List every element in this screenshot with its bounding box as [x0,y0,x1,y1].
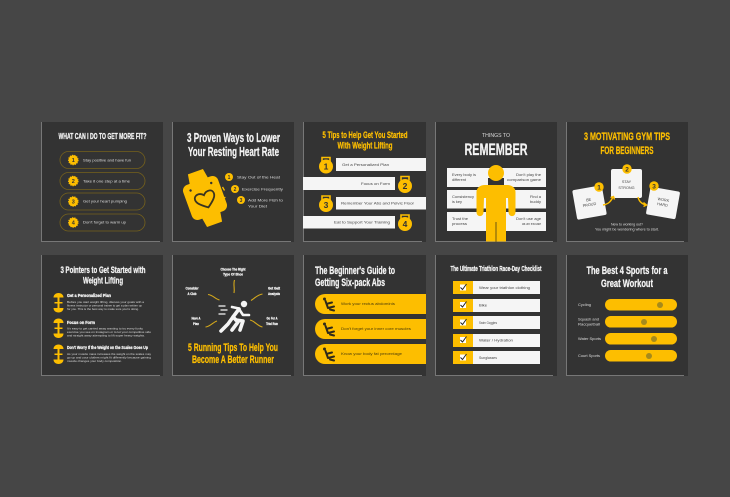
note cards: is key [452,200,462,204]
panel: things to remember [435,122,557,242]
note cards: Find a [530,195,541,199]
panel: three pointers [41,255,163,376]
pointer 1 text [67,293,145,311]
item 4 [60,214,145,231]
card: work hard [646,181,680,219]
tip 3: Know your body fat percentage [341,352,402,356]
card: stay strong: STAY [622,180,632,184]
panel: six-pack abs [303,255,426,376]
title [586,265,668,290]
item 3: 3 [72,200,75,206]
panel: running tips [172,255,294,376]
checklist row 3: Swim Goggles [479,321,497,325]
pointer 2 text: Focus on Form [67,320,95,325]
title: 5 Running Tips To Help You [188,342,278,354]
tip 1: Work your rectus abdominis [341,302,395,306]
title [60,265,146,286]
pointer 2 text: and straight away attempting to lift super heavy weights. [67,334,145,338]
checklist row 2: Bike [479,304,487,308]
title: WHAT CAN I DO TO GET MORE FIT? [58,132,147,141]
title [315,265,395,289]
pointer 2 text [67,320,152,338]
pointer 3 text [67,345,152,363]
pointer 3 text: Don't Worry If the Weight on the Scales Goes Up [67,345,148,350]
labels around runner: Consider [186,286,199,290]
item 4: Don't forget to warm up [83,220,126,224]
labels around runner: Choose The Right [220,266,246,272]
item 1: Stay Out of the Heat [237,174,281,180]
tip 3 [319,196,426,212]
icon: dumbbell 2 [54,318,64,338]
pointer 1 text: Before you start weight lifting, discuss your goals with a [67,300,145,304]
card: work hard: 3 [652,184,656,190]
caption: You might be wondering where to start. [595,228,659,232]
title: REMEMBER [464,140,528,159]
tip 4: Eat to Support Your Training [334,220,390,224]
labels around runner: Trial Run [266,321,278,326]
item 1: 1 [228,175,231,181]
item 1 [225,173,281,181]
title: With Weight Lifting [338,140,392,150]
pointer 3 text: muscle changes your body composition. [67,359,122,363]
card: stay strong [611,164,642,198]
slider: cycling: Cycling [578,303,591,307]
tip 2: Don't forget your inner core muscles [341,327,411,331]
arrows between cards [603,196,646,206]
title: Your Resting Heart Rate [188,144,279,159]
item 3 [60,193,145,210]
caption: New to working out? [611,222,643,226]
card: be proud: 1 [597,184,601,192]
title [187,130,280,159]
note cards: as an excuse [522,222,541,226]
pointer 1 text: Get a Personalized Plan [67,293,111,298]
labels around runner: A Club [188,291,197,296]
icon: dumbbell 3 [54,344,64,364]
tip 3: 3 [324,200,329,210]
icon: smartwatch with heart [178,165,232,231]
tip 4 [303,215,412,231]
title [188,342,278,366]
item 3: Your Diet [248,204,268,208]
caption [595,222,659,232]
icon: standing person [476,165,516,242]
title: The Beginner's Guide to [315,265,395,277]
checklist row 4: Water / Hydration [479,338,513,342]
slider: squash and racquetball [578,316,677,328]
pointer 2 text: It's easy to get carried away wanting to try every funky [67,326,144,330]
pointer 2 text: exercise you see on Instagram or to let your competitive side [67,330,152,334]
title: FOR BEGINNERS [600,145,654,157]
panel: what can I do to get more fit [41,122,163,242]
labels around runner: Analysis [268,291,281,296]
title: THINGS TO [482,133,510,139]
item 2: 2 [72,179,75,185]
pointer 1 text: for you. This is the best way to make sure you're doing. [67,307,139,311]
tip 4: 4 [403,219,408,229]
item 2: Take it one step at a time [83,180,130,184]
card: work hard: HARD [657,202,668,208]
panel: weight lifting tips [303,122,426,242]
tip 2: Focus on Form [361,182,390,186]
title: The Best 4 Sports for a [586,265,668,277]
arrows around runner [206,280,262,327]
note cards: buddy [530,200,541,204]
card: stay strong: 2 [625,166,629,174]
title: The Ultimate Triathlon Race-Day Checklist [450,266,542,273]
title: Great Workout [601,278,653,290]
item 3: Get your heart pumping [83,200,127,204]
title [322,130,408,150]
panel: resting heart rate [172,122,294,242]
icon: runner [219,301,249,331]
pointer 3 text: go up and your clothes might fit differently because gaining [67,356,152,360]
slider: court sports: Court Sports [578,354,600,358]
title: 3 Proven Ways to Lower [187,130,280,145]
tip 1: Get a Personalized Plan [342,163,389,167]
slider: squash and racquetball: Racquetball [578,322,600,326]
item 2: Exercise Frequently [242,186,283,192]
pointer 1 text: fitness instructor or personal trainer to get a plan written up [67,304,143,308]
note cards: Consistency [452,195,474,199]
icon: watch spark [222,187,226,198]
item 2 [60,172,145,190]
slider: squash and racquetball: Squash and [578,318,599,322]
note cards: different [452,178,466,182]
item 2 [231,185,283,193]
labels around runner: Type Of Shoe [223,272,244,276]
slider: water sports: Water Sports [578,337,601,341]
card: be proud: BE [586,198,592,202]
tip 2: 2 [403,181,408,191]
card: be proud: PROUD [582,202,597,208]
item 3: 3 [240,198,243,204]
item 1: 1 [72,158,75,164]
note cards: process [452,222,467,226]
labels around runner: Plan [193,321,199,326]
tip 1 [319,158,426,174]
note cards: Trust the [452,217,468,221]
panel: triathlon checklist [435,255,557,376]
item 1 [60,152,145,168]
note cards: comparison game [507,178,541,182]
item 3: Add More Fish to [248,198,284,202]
card: work hard: WORK [657,197,670,203]
title [584,131,670,157]
note cards: Every body is [452,173,476,177]
labels around runner: Get Gait [268,286,281,290]
title: Getting Six-pack Abs [315,277,385,289]
note cards [447,168,546,231]
title: 3 Pointers to Get Started with [60,265,146,275]
title [464,133,528,159]
item 3 [237,196,284,208]
card: be proud [572,182,607,220]
item 4: 4 [72,220,76,226]
tip 1: 1 [324,162,329,172]
note cards: Don't use age [516,217,541,221]
pointer 3 text: As your muscle mass increases the weight on the scales may [67,352,152,356]
item 1: Stay positive and have fun [83,158,131,162]
checklist row 5: Sunglasses [479,356,497,360]
note cards: Don't play the [516,173,541,177]
tip 3: Remember Your Abs and Pelvic Floor [341,202,415,206]
title: Become A Better Runner [192,354,274,366]
checklist row 1: Wear your triathlon clothing [479,286,530,290]
title: 5 Tips to Help Get You Started [322,130,408,140]
labels around runner [186,266,281,326]
labels around runner: Go For A [266,316,278,320]
tip 2 [303,176,412,193]
panel: motivating gym tips [566,122,688,242]
panel: best 4 sports [566,255,688,376]
title: 3 MOTIVATING GYM TIPS [584,131,670,143]
item 2: 2 [234,187,237,193]
title: Weight Lifting [83,276,123,286]
icon: dumbbell 1 [54,293,64,312]
card: stay strong: STRONG [618,186,635,190]
labels around runner: Have A [192,316,201,320]
